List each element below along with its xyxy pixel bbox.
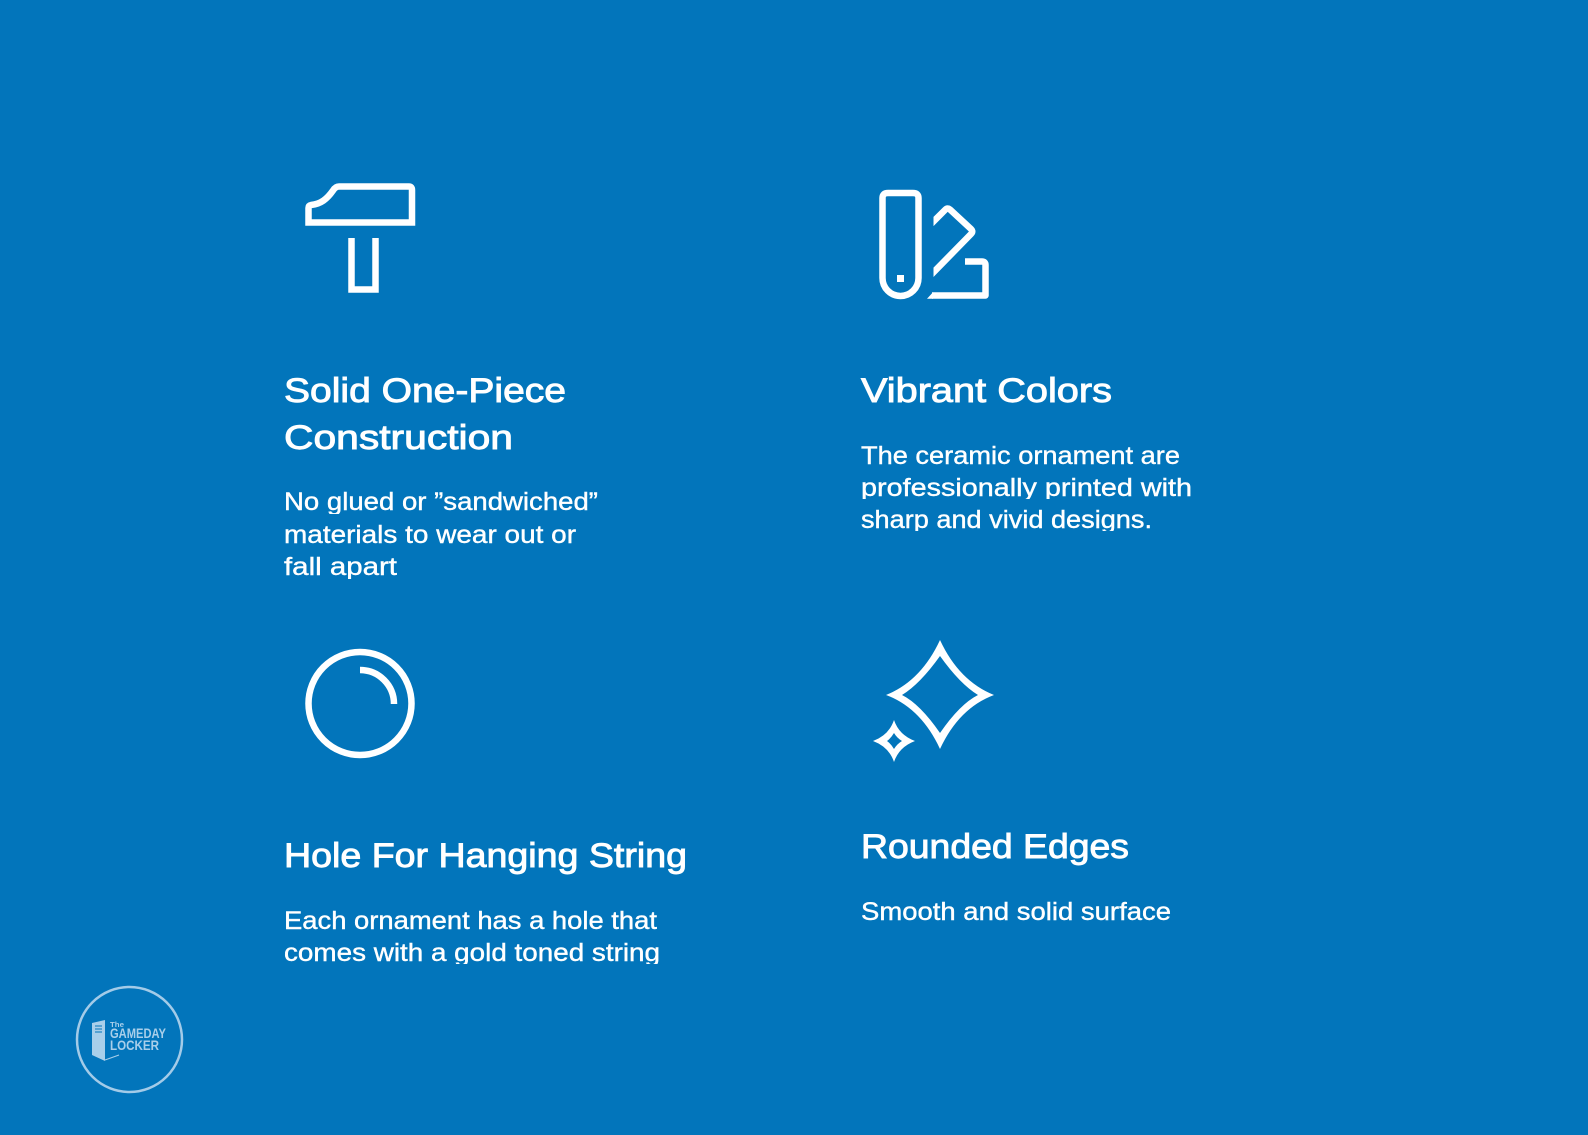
heading: solid one-piece construction: Solid One-Piece xyxy=(284,372,566,410)
text: vibrant colors description: professionally printed with xyxy=(861,474,1192,502)
icon: locker xyxy=(92,1020,119,1061)
logo: the gameday locker xyxy=(77,987,182,1092)
icon: circle hole xyxy=(308,652,412,755)
logo text: GAMEDAY xyxy=(110,1025,167,1041)
heading: hole for hanging string: Hole For Hanging String xyxy=(284,837,687,875)
heading: solid one-piece construction: Construction xyxy=(284,419,513,457)
heading: vibrant colors: Vibrant Colors xyxy=(861,372,1112,410)
text: rounded edges description: Smooth and solid surface xyxy=(861,898,1171,926)
panel: vibrant colors xyxy=(861,193,1192,534)
text: solid one-piece description: No glued or ”sandwiched” xyxy=(284,488,598,516)
icon: sparkle xyxy=(873,640,994,762)
panel: hole for hanging string xyxy=(284,652,687,967)
text: solid one-piece description: materials to wear out or xyxy=(284,521,576,549)
icon: hammer xyxy=(308,186,412,290)
text: hole description: comes with a gold toned string xyxy=(284,939,660,967)
heading: rounded edges: Rounded Edges xyxy=(861,828,1129,866)
text: vibrant colors description: The ceramic ornament are xyxy=(861,442,1180,470)
text: solid one-piece description: fall apart xyxy=(284,553,397,581)
text: vibrant colors description: sharp and vivid designs. xyxy=(861,506,1152,534)
logo text xyxy=(110,1022,167,1053)
panel: rounded edges xyxy=(861,640,1171,926)
text: hole description xyxy=(284,910,658,964)
logo text: LOCKER xyxy=(110,1037,159,1053)
panel: solid one-piece construction xyxy=(284,186,598,581)
text: hole description: Each ornament has a hole that xyxy=(284,907,657,935)
text: vibrant colors description xyxy=(861,442,1192,534)
text: solid one-piece description xyxy=(284,488,598,581)
logo text: The xyxy=(110,1022,124,1029)
icon: color swatches xyxy=(882,193,986,299)
